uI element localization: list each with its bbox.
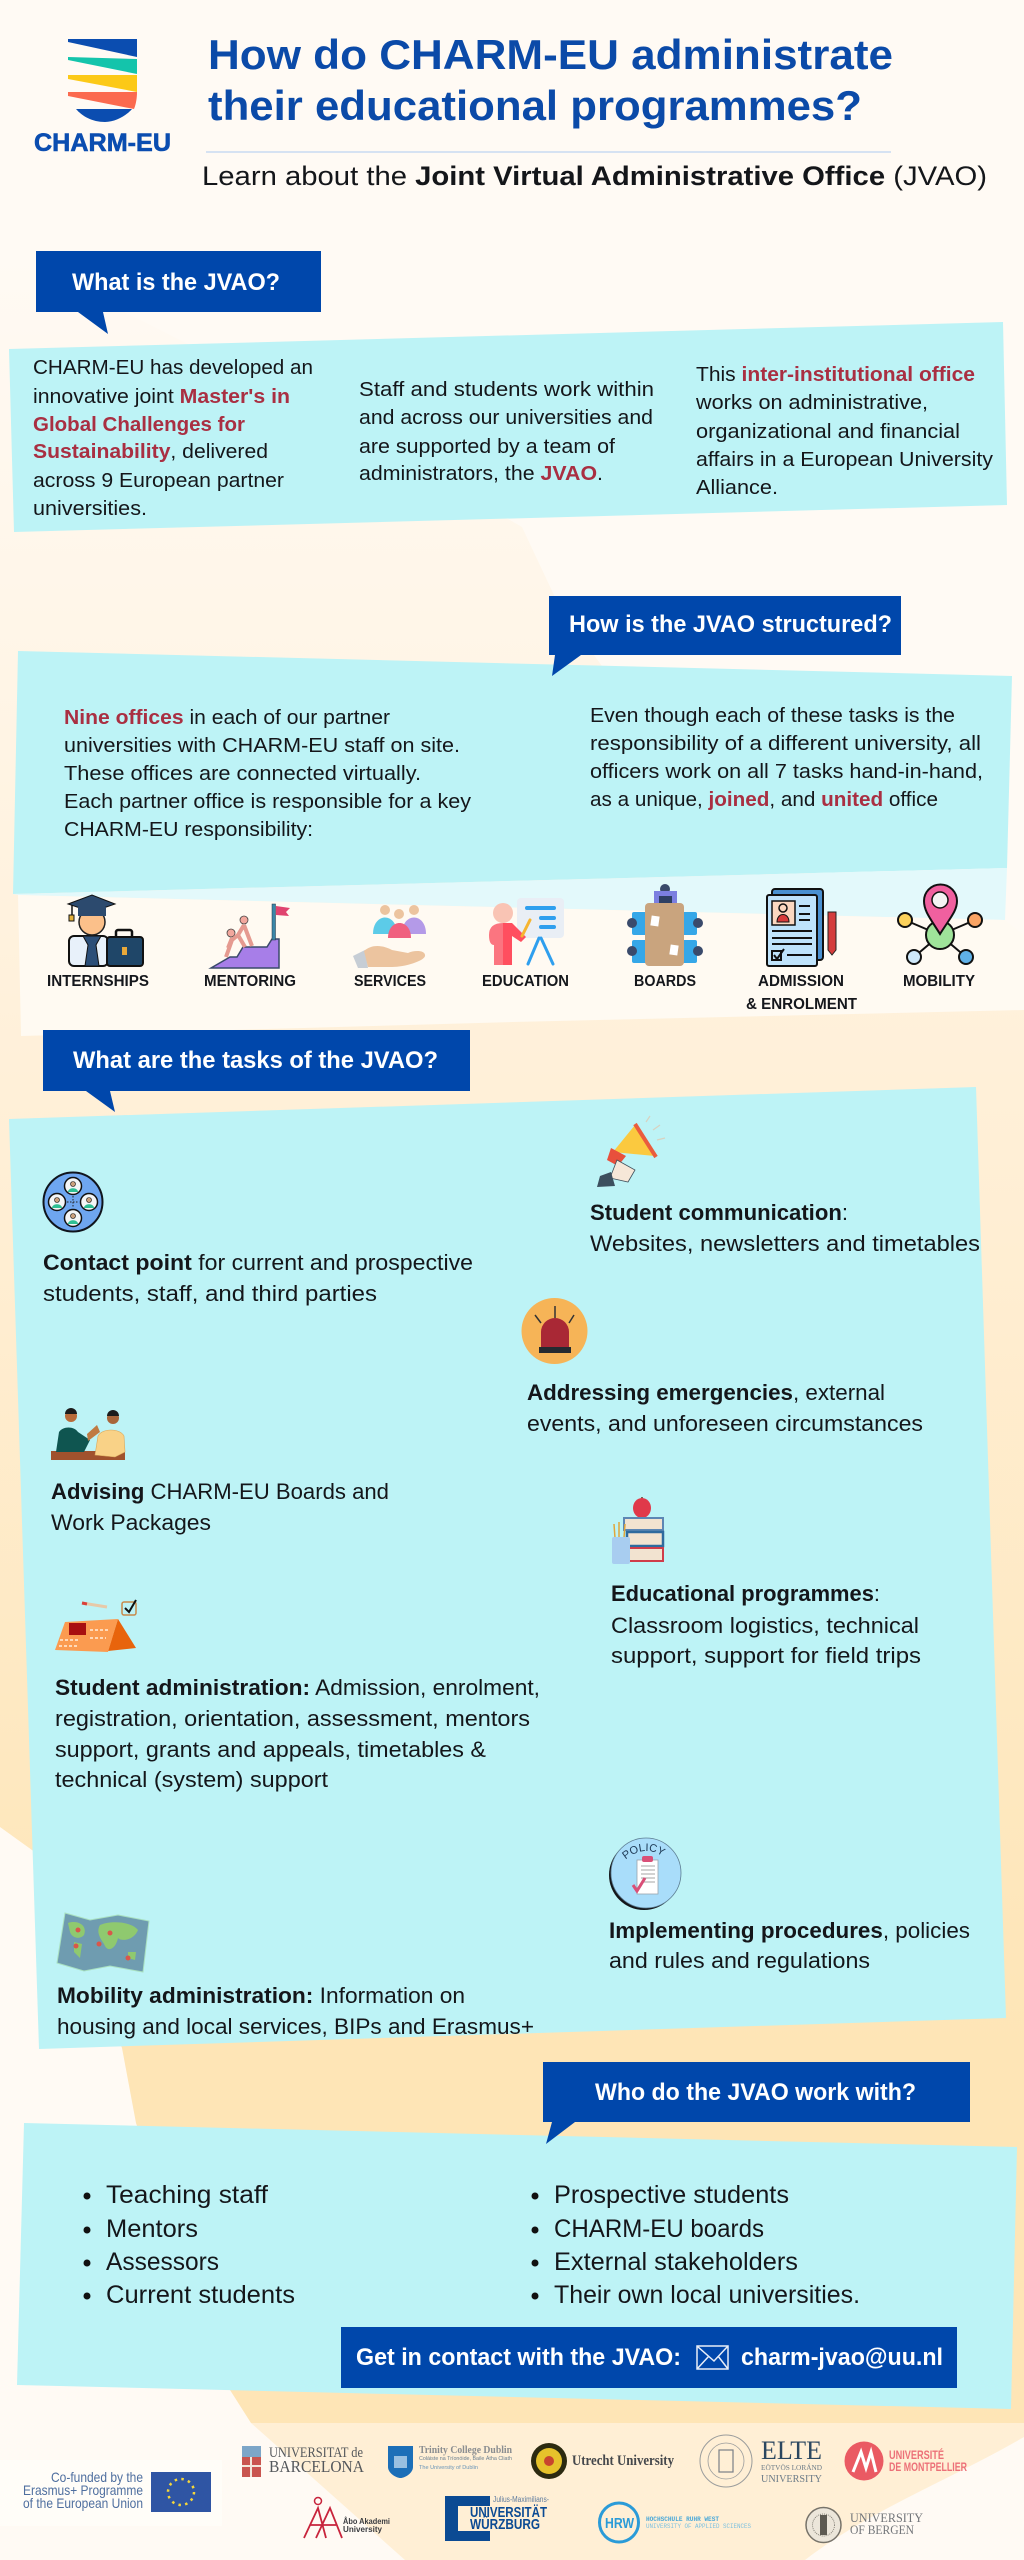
text: master's programme: Sustainability, delivered — [33, 440, 268, 463]
icon: megaphone — [597, 1116, 665, 1187]
task: implementing procedures: Implementing procedures, policies — [609, 1918, 970, 1943]
heading bubble: who do the JVAO work with: Who do the JVAO work with? — [595, 2079, 916, 2106]
icon labels: MOBILITY — [903, 973, 975, 990]
task: contact point — [43, 1172, 473, 1306]
icon labels: MENTORING — [204, 973, 296, 990]
logo: Åbo Akademi University: University — [343, 2524, 382, 2534]
logo: Universität Würzburg — [445, 2495, 549, 2541]
logo: Åbo Akademi University — [304, 2498, 390, 2538]
logo: ELTE: EÖTVÖS LORÁND — [761, 2464, 822, 2472]
logo: ELTE: UNIVERSITY — [761, 2473, 822, 2485]
text: staff and students — [359, 378, 654, 485]
text: inter-institutional office: This inter-institutional office — [696, 363, 975, 386]
text: hand in hand: officers work on all 7 tasks hand-in-hand, — [590, 760, 983, 783]
logo: Hochschule Ruhr West: UNIVERSITY OF APPLIED SCIENCES — [646, 2523, 751, 2530]
list: right column: External stakeholders — [554, 2248, 798, 2276]
task: mobility administration: housing and local services, BIPs and Erasmus+ — [57, 2014, 534, 2039]
logo: CHARM-EU: CHARM-EU — [34, 129, 171, 157]
text: master's programme — [33, 356, 313, 520]
task: educational programmes: Educational programmes: — [611, 1581, 880, 1606]
task: educational programmes — [611, 1497, 921, 1668]
list: left column: Assessors — [106, 2248, 219, 2276]
text: hand in hand: as a unique, joined, and united office — [590, 788, 938, 811]
logo: Universität Würzburg: WÜRZBURG — [470, 2516, 540, 2533]
text: nine offices: Nine offices in each of our partner — [64, 706, 390, 729]
logo: Utrecht University: Utrecht University — [572, 2453, 674, 2469]
text: staff and students: Staff and students work within — [359, 378, 654, 401]
text: staff and students: and across our universities and — [359, 406, 653, 429]
text: master's programme: innovative joint Master's in — [33, 385, 290, 408]
logo: Université de Montpellier: DE MONTPELLIER — [889, 2460, 967, 2474]
task: student administration: technical (system) support — [55, 1767, 328, 1792]
text: staff and students: administrators, the JVAO. — [359, 462, 603, 485]
icon: internships — [68, 895, 143, 966]
task: advising — [51, 1408, 389, 1535]
logo: Université de Montpellier: UNIVERSITÉ — [889, 2447, 944, 2462]
task: implementing procedures — [609, 1838, 970, 1973]
icon: boards — [627, 884, 703, 966]
text: inter-institutional office: Alliance. — [696, 476, 778, 499]
list: right column — [532, 2181, 860, 2309]
icon: calendar — [55, 1600, 136, 1652]
task: student administration: registration, orientation, assessment, mentors — [55, 1706, 530, 1731]
heading bubble: how is the JVAO structured — [549, 596, 901, 676]
logos backdrop band — [0, 2423, 1024, 2560]
task: addressing emergencies — [522, 1298, 923, 1436]
icon: books and apple — [612, 1497, 663, 1564]
text: master's programme: CHARM-EU has developed an — [33, 356, 313, 379]
icon labels: ADMISSION — [758, 973, 844, 990]
text: hand in hand: responsibility of a different university, all — [590, 732, 981, 755]
list: left column: Current students — [106, 2281, 295, 2309]
text: master's programme: Global Challenges for — [33, 413, 245, 436]
task: student administration: Student administration: Admission, enrolment, — [55, 1675, 540, 1700]
icon: two people talking — [51, 1408, 125, 1460]
logo: Hochschule Ruhr West: HOCHSCHULE RUHR WEST — [646, 2516, 719, 2523]
heading bubble: what are the tasks: What are the tasks of the JVAO? — [73, 1047, 438, 1074]
text: inter-institutional office: works on administrative, — [695, 391, 928, 414]
text: nine offices: universities with CHARM-EU staff on site. — [64, 734, 460, 757]
panel: how is the JVAO structured — [13, 651, 1012, 894]
list: right column: CHARM-EU boards — [554, 2215, 764, 2243]
heading bubble: what is the JVAO — [36, 251, 321, 334]
text: inter-institutional office — [695, 363, 994, 499]
logo: Hochschule Ruhr West: HRW — [605, 2515, 635, 2532]
task: educational programmes: Classroom logistics, technical — [611, 1613, 919, 1638]
logo: Trinity College Dublin — [388, 2444, 512, 2478]
panel: tasks of the JVAO — [9, 1087, 1006, 2049]
task: implementing procedures: and rules and regulations — [609, 1948, 870, 1973]
logo: Erasmus+ co-funding: of the European Union — [23, 2495, 143, 2511]
task: mobility administration: Mobility administration: Information on — [57, 1983, 465, 2008]
icon: services — [353, 905, 426, 968]
heading bubble: how is the JVAO structured: How is the JVAO structured? — [569, 611, 892, 638]
task: student communication: Websites, newsletters and timetables — [590, 1231, 980, 1256]
logo: Universitat de Barcelona: BARCELONA — [269, 2457, 365, 2476]
logo: University of Bergen: OF BERGEN — [850, 2523, 914, 2537]
icon: policy badge: POLICY — [622, 1844, 666, 1859]
logo: University of Bergen: UNIVERSITY — [850, 2511, 923, 2525]
logo: Universität Würzburg: Julius-Maximilians- — [493, 2495, 549, 2504]
subtitle: Learn about the Joint Virtual Administrative Office (JVAO) — [202, 161, 987, 191]
list: right column: Prospective students — [554, 2181, 789, 2209]
heading bubble: what are the tasks — [43, 1030, 470, 1112]
task: student communication: Student communication: — [590, 1200, 848, 1225]
logo: University of Bergen — [806, 2508, 923, 2542]
logo: CHARM-EU — [34, 39, 171, 157]
heading bubble: what is the JVAO: What is the JVAO? — [72, 269, 280, 296]
callout: contact: Get in contact with the JVAO: — [356, 2344, 681, 2371]
logo: Universitat de Barcelona: UNIVERSITAT de — [269, 2445, 363, 2461]
text: inter-institutional office: affairs in a European University — [696, 448, 994, 471]
task: mobility administration — [57, 1913, 534, 2039]
icon: alarm siren — [522, 1298, 588, 1364]
callout: contact: charm-jvao@uu.nl — [741, 2344, 943, 2371]
icon: policy badge — [609, 1838, 682, 1910]
icon labels: & ENROLMENT — [746, 996, 857, 1013]
icon labels: EDUCATION — [482, 973, 569, 990]
panel: responsibilities strip — [13, 868, 1024, 1036]
panel: who the JVAO works with — [17, 2123, 1017, 2409]
icon: admission and enrolment — [767, 889, 836, 966]
text: staff and students: are supported by a team of — [359, 435, 615, 458]
text: master's programme: across 9 European partner — [33, 469, 284, 492]
list: left column: Teaching staff — [106, 2181, 268, 2209]
icon: education — [489, 898, 564, 965]
panel: what is the JVAO — [9, 322, 1007, 532]
task: contact point: students, staff, and third parties — [43, 1281, 377, 1306]
logo: ELTE — [700, 2435, 822, 2487]
text: master's programme: universities. — [33, 497, 147, 520]
logo: Trinity College Dublin: The University of Dublin — [419, 2465, 478, 2471]
logo: Erasmus+ co-funding: Erasmus+ Programme — [23, 2482, 143, 2498]
icon: world map — [57, 1913, 149, 1972]
text: hand in hand: Even though each of these tasks is the — [590, 704, 955, 727]
list: left column — [84, 2181, 295, 2309]
task: contact point: Contact point for current and prospective — [43, 1250, 473, 1275]
title: their educational programmes? — [208, 82, 862, 129]
logo: Trinity College Dublin: Trinity College Dublin — [419, 2444, 512, 2456]
logo: ELTE: ELTE — [761, 2436, 822, 2465]
list: left column: Mentors — [106, 2215, 198, 2243]
text: inter-institutional office: organizational and financial — [696, 420, 960, 443]
title — [208, 31, 893, 129]
task: student communication — [590, 1116, 980, 1256]
icon: mentoring — [211, 904, 290, 968]
icon: envelope — [697, 2346, 728, 2369]
task: student administration: support, grants and appeals, timetables & — [55, 1737, 486, 1762]
logo: Universitat de Barcelona — [242, 2445, 365, 2477]
list: right column: Their own local universities. — [554, 2281, 860, 2309]
logo: Universität Würzburg: UNIVERSITÄT — [470, 2504, 547, 2521]
text: nine offices: These offices are connected virtually. — [64, 762, 421, 785]
text: nine offices — [64, 706, 472, 841]
task: advising: Work Packages — [51, 1510, 211, 1535]
logo: Åbo Akademi University: Åbo Akademi — [343, 2516, 390, 2526]
task: advising: Advising CHARM-EU Boards and — [51, 1479, 389, 1504]
logo: Erasmus+ co-funding: Co-funded by the — [51, 2469, 143, 2485]
icon labels — [47, 973, 975, 1013]
logo: Trinity College Dublin: Coláiste na Tríonóide, Baile Átha Cliath — [419, 2455, 512, 2462]
text: nine offices: Each partner office is responsible for a key — [64, 790, 472, 813]
icon labels: BOARDS — [634, 973, 696, 990]
icon labels: SERVICES — [354, 973, 426, 990]
icon: contact network — [44, 1172, 102, 1232]
heading bubble: who do the JVAO work with — [543, 2062, 970, 2144]
icon labels: INTERNSHIPS — [47, 973, 149, 990]
task: addressing emergencies: Addressing emergencies, external — [527, 1380, 885, 1405]
logo: Université de Montpellier — [844, 2442, 967, 2480]
callout: contact — [341, 2327, 957, 2388]
title: How do CHARM-EU administrate — [208, 31, 893, 78]
task: addressing emergencies: events, and unforeseen circumstances — [527, 1411, 923, 1436]
logo: Hochschule Ruhr West — [600, 2503, 751, 2542]
task: student administration — [55, 1600, 540, 1792]
icon: mobility — [898, 885, 982, 964]
text: nine offices: CHARM-EU responsibility: — [64, 818, 313, 841]
logo: Erasmus+ co-funding — [0, 2460, 222, 2526]
text: hand in hand — [590, 704, 983, 811]
task: educational programmes: support, support for field trips — [611, 1643, 921, 1668]
logo: Utrecht University — [531, 2443, 674, 2479]
